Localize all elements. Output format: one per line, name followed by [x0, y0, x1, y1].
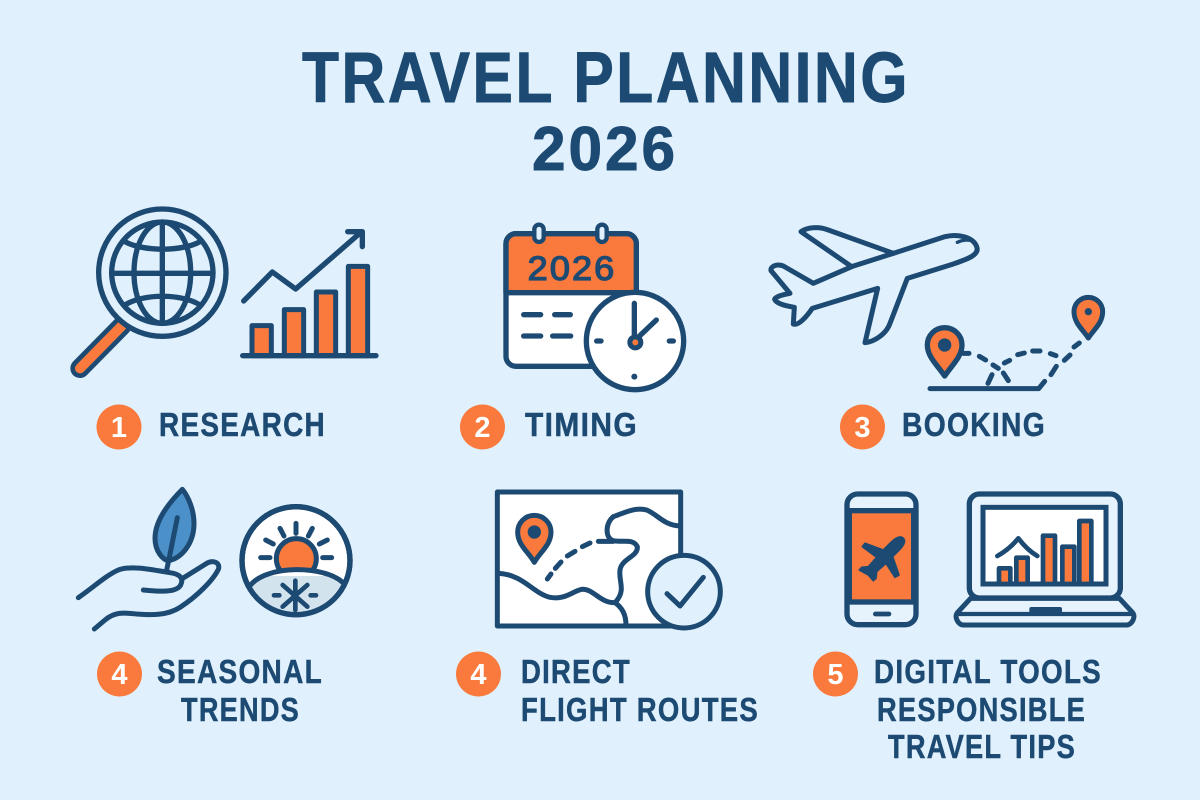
icon: hand holding leaf	[78, 489, 219, 629]
label: direct flight routes: FLIGHT ROUTES	[521, 691, 759, 728]
icon: calendar	[506, 225, 636, 366]
panel: booking	[771, 228, 1103, 450]
icon: check badge	[648, 555, 720, 628]
label: seasonal trends: TRENDS	[181, 691, 300, 728]
label: research: RESEARCH	[159, 406, 326, 443]
label: timing: TIMING	[525, 406, 638, 443]
label: digital tools responsible travel tips: DIGITAL TOOLS	[874, 653, 1102, 690]
icon: magnifying glass with globe	[80, 209, 226, 368]
step badge 5: 5	[827, 659, 844, 691]
label: direct flight routes	[521, 653, 759, 728]
label: digital tools responsible travel tips	[874, 653, 1102, 765]
icon: route map	[497, 492, 681, 626]
label: booking: BOOKING	[902, 406, 1046, 443]
panel: direct flight routes	[456, 492, 759, 728]
icon: sun and snow season badge	[242, 507, 350, 615]
icon: smartphone	[847, 494, 916, 625]
step badge 1	[96, 404, 142, 450]
label: direct flight routes: DIRECT	[521, 653, 631, 690]
step badge 4	[97, 652, 142, 696]
icon: laptop with chart	[956, 494, 1134, 625]
icon: clock	[586, 292, 684, 390]
icon: airplane	[771, 228, 977, 343]
label: seasonal trends	[157, 653, 323, 728]
panel: digital tools	[813, 494, 1134, 765]
step badge 3: 3	[854, 412, 871, 444]
step badge 4: 4	[470, 659, 487, 691]
title: TRAVEL PLANNING	[302, 39, 910, 118]
panel: research	[80, 209, 376, 450]
title: 2026	[532, 115, 678, 184]
step badge 5	[813, 652, 858, 696]
label: digital tools responsible travel tips: RESPONSIBLE	[877, 691, 1086, 728]
panel: timing	[460, 225, 684, 450]
icon: rising bar chart	[243, 232, 376, 356]
step badge 2: 2	[474, 412, 491, 444]
panel: seasonal trends	[78, 489, 350, 728]
step badge 1: 1	[111, 412, 127, 444]
icon: calendar: 2026	[528, 250, 616, 288]
step badge 3	[840, 404, 885, 450]
step badge 4: 4	[111, 659, 128, 691]
step badge 2	[460, 404, 505, 450]
step badge 4	[456, 652, 501, 696]
title	[302, 39, 910, 184]
label: digital tools responsible travel tips: TRAVEL TIPS	[888, 728, 1076, 765]
label: seasonal trends: SEASONAL	[157, 653, 323, 690]
icon: route with map pins	[927, 297, 1103, 389]
